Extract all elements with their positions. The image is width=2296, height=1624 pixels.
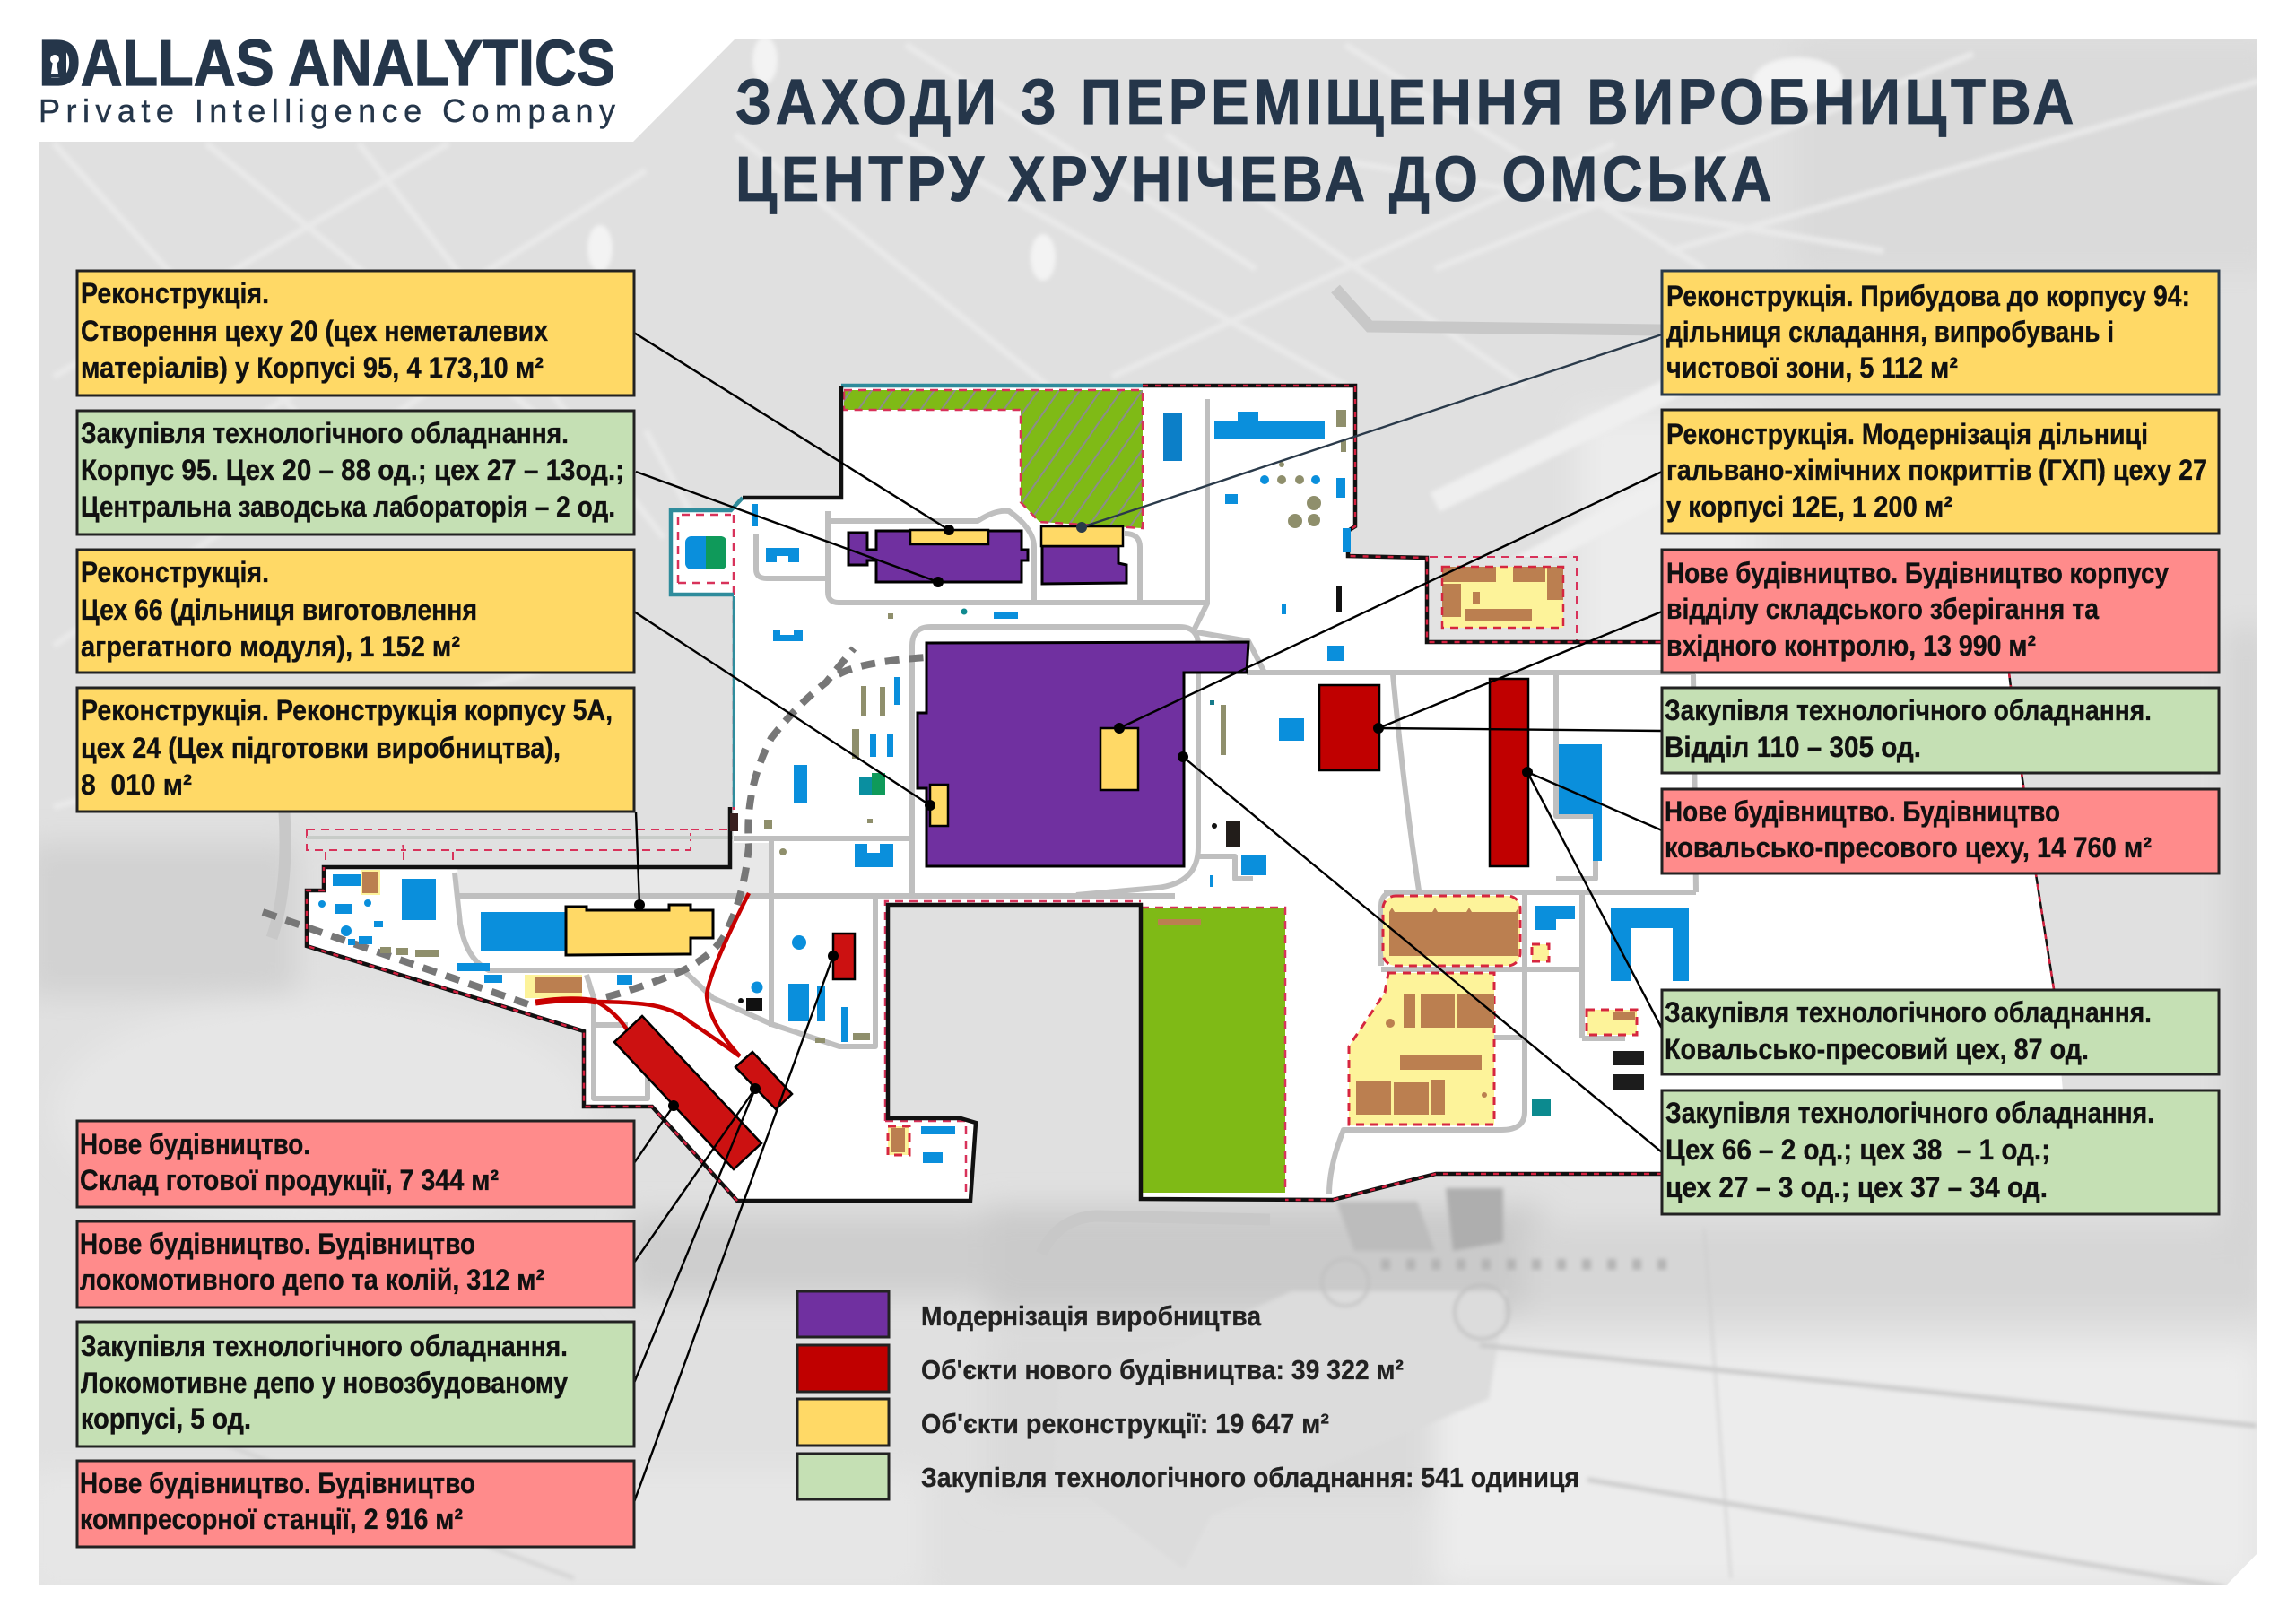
callout: finished goods warehouse: Склад готової продукції, 7 344 м² — [80, 1164, 499, 1196]
callout: reconstruction workshop 66 — [77, 550, 634, 673]
callout: forging workshop construction: Нове будівництво. Будівництво — [1665, 795, 2060, 828]
callout: reconstruction workshop 20: Створення цеху 20 (цех неметалевих — [81, 315, 548, 347]
callout: storage and incoming control corpus: вхідного контролю, 13 990 м² — [1666, 630, 2036, 662]
title: ЦЕНТРУ ХРУНІЧЕВА ДО ОМСЬКА — [735, 144, 1776, 215]
callout: equipment corpus 95: Центральна заводська лабораторія – 2 од. — [81, 491, 615, 523]
legend: reconstruction — [797, 1399, 1329, 1446]
callout: galvanic section: Реконструкція. Модернізація дільниці — [1666, 418, 2148, 450]
callout: galvanic section — [1662, 410, 2219, 534]
callout: workshop equipment list: Закупівля технологічного обладнання. — [1665, 1097, 2154, 1129]
logo: DALLAS ANALYTICS — [39, 28, 615, 100]
roads — [455, 399, 1696, 1194]
callout: locomotive depot: Нове будівництво. Будівництво — [80, 1228, 475, 1260]
callout: finished goods warehouse — [77, 1121, 634, 1207]
purple building: corpus 95 with yellow reconstruction — [848, 530, 1028, 582]
callout: extension to corpus 94: дільниця складання, випробувань і — [1666, 316, 2114, 348]
callout: reconstruction workshop 20: Реконструкція. — [81, 277, 269, 309]
legend: new construction — [797, 1345, 1404, 1392]
callout: equipment corpus 95 — [77, 411, 634, 534]
callout: equipment corpus 95: Закупівля технологічного обладнання. — [81, 417, 569, 449]
title: ЗАХОДИ З ПЕРЕМІЩЕННЯ ВИРОБНИЦТВА — [735, 67, 2078, 138]
red rail link curves — [535, 893, 749, 1056]
callout: reconstruction workshop 20 — [77, 271, 634, 395]
logo: Private Intelligence Company — [39, 92, 615, 129]
callout: forging workshop equipment: Закупівля технологічного обладнання. — [1665, 996, 2152, 1029]
background: decorative road pieces — [272, 289, 1662, 1254]
callout: depot equipment — [77, 1322, 634, 1446]
callout: locomotive depot: локомотивного депо та колій, 312 м² — [80, 1264, 544, 1296]
callout: workshop equipment list — [1662, 1090, 2219, 1214]
callout: reconstruction corpus 5A: Реконструкція. Реконструкція корпусу 5А, — [81, 694, 613, 726]
callout: forging workshop equipment — [1662, 990, 2219, 1074]
site boundary — [307, 386, 2054, 1201]
map base — [307, 386, 2063, 1201]
light grey outer plots — [457, 812, 771, 897]
purple building: corpus 94 with yellow extension — [1041, 526, 1126, 584]
title — [735, 67, 2078, 215]
callout: galvanic section: гальвано-хімічних покриттів (ГХП) цеху 27 — [1666, 454, 2207, 486]
callout: forging workshop construction: ковальсько-пресового цеху, 14 760 м² — [1665, 831, 2152, 864]
legend: reconstruction: Об'єкти реконструкції: 19 647 м² — [921, 1408, 1329, 1439]
callout: compressor station: Нове будівництво. Будівництво — [80, 1467, 475, 1499]
callout: storage and incoming control corpus: Нове будівництво. Будівництво корпусу — [1666, 557, 2169, 589]
callout: forging workshop construction — [1662, 789, 2219, 873]
logo — [39, 28, 615, 129]
callout: department 110 equipment: Закупівля технологічного обладнання. — [1665, 694, 2152, 726]
callout: extension to corpus 94: Реконструкція. Прибудова до корпусу 94: — [1666, 280, 2190, 312]
leader lines with dots — [634, 333, 1662, 1502]
callout: equipment corpus 95: Корпус 95. Цех 20 – 88 од.; цех 27 – 13од.; — [81, 454, 624, 486]
site plan white ground — [307, 386, 2063, 1201]
callout: forging workshop equipment: Ковальсько-пресовий цех, 87 од. — [1665, 1033, 2089, 1065]
legend: modernization: Модернізація виробництва — [921, 1300, 1262, 1332]
yellow reconstruction: corpus 5A with blue annex — [481, 905, 713, 955]
callout: galvanic section: у корпусі 12Е, 1 200 м² — [1666, 491, 1952, 523]
legend: new construction: Об'єкти нового будівництва: 39 322 м² — [921, 1354, 1404, 1385]
main purple production hall — [918, 642, 1248, 866]
callout: reconstruction workshop 66: агрегатного модуля), 1 152 м² — [81, 630, 460, 663]
background highlights: ceiling lights — [587, 37, 1843, 281]
legend: equipment purchase — [797, 1454, 1579, 1499]
callout: reconstruction workshop 66: Цех 66 (дільниця виготовлення — [81, 594, 477, 626]
yellow zones with brown buildings — [1349, 567, 1637, 1125]
callout: compressor station — [77, 1461, 634, 1547]
callout: reconstruction corpus 5A: цех 24 (Цех підготовки виробництва), — [81, 732, 561, 764]
callout: storage and incoming control corpus — [1662, 550, 2219, 673]
callout: reconstruction corpus 5A — [77, 688, 634, 812]
callout: extension to corpus 94 — [1662, 271, 2219, 395]
callout: workshop equipment list: Цех 66 – 2 од.; цех 38 – 1 од.; — [1665, 1133, 2050, 1166]
legend: modernization — [797, 1291, 1262, 1337]
ancillary buildings — [318, 410, 1689, 1163]
railway dashed track — [263, 648, 926, 1004]
callout: locomotive depot — [77, 1221, 634, 1307]
callout: department 110 equipment: Відділ 110 – 305 од. — [1665, 731, 1921, 763]
callout: depot equipment: Локомотивне депо у новозбудованому — [81, 1367, 568, 1399]
legend — [797, 1291, 1579, 1499]
callout: department 110 equipment — [1662, 688, 2219, 773]
callout: workshop equipment list: цех 27 – 3 од.; цех 37 – 34 од. — [1665, 1171, 2048, 1203]
callout: extension to corpus 94: чистової зони, 5 112 м² — [1666, 352, 1958, 384]
callout: reconstruction corpus 5A: 8 010 м² — [81, 769, 192, 801]
legend: equipment purchase: Закупівля технологічного обладнання: 541 одиниця — [921, 1462, 1579, 1493]
callout: storage and incoming control corpus: відділу складського зберігання та — [1666, 593, 2099, 625]
callout: depot equipment: Закупівля технологічного обладнання. — [81, 1330, 568, 1362]
new construction: red buildings — [614, 679, 1528, 1169]
hatched green zone — [844, 390, 1143, 528]
callout: finished goods warehouse: Нове будівництво. — [80, 1128, 310, 1160]
background: machinery silhouette — [90, 1188, 2257, 1587]
callout: reconstruction workshop 66: Реконструкція. — [81, 556, 269, 588]
callout: reconstruction workshop 20: матеріалів) у Корпусі 95, 4 173,10 м² — [81, 352, 544, 384]
callout: depot equipment: корпусі, 5 од. — [81, 1403, 251, 1435]
callout: compressor station: компресорної станції, 2 916 м² — [80, 1503, 463, 1535]
